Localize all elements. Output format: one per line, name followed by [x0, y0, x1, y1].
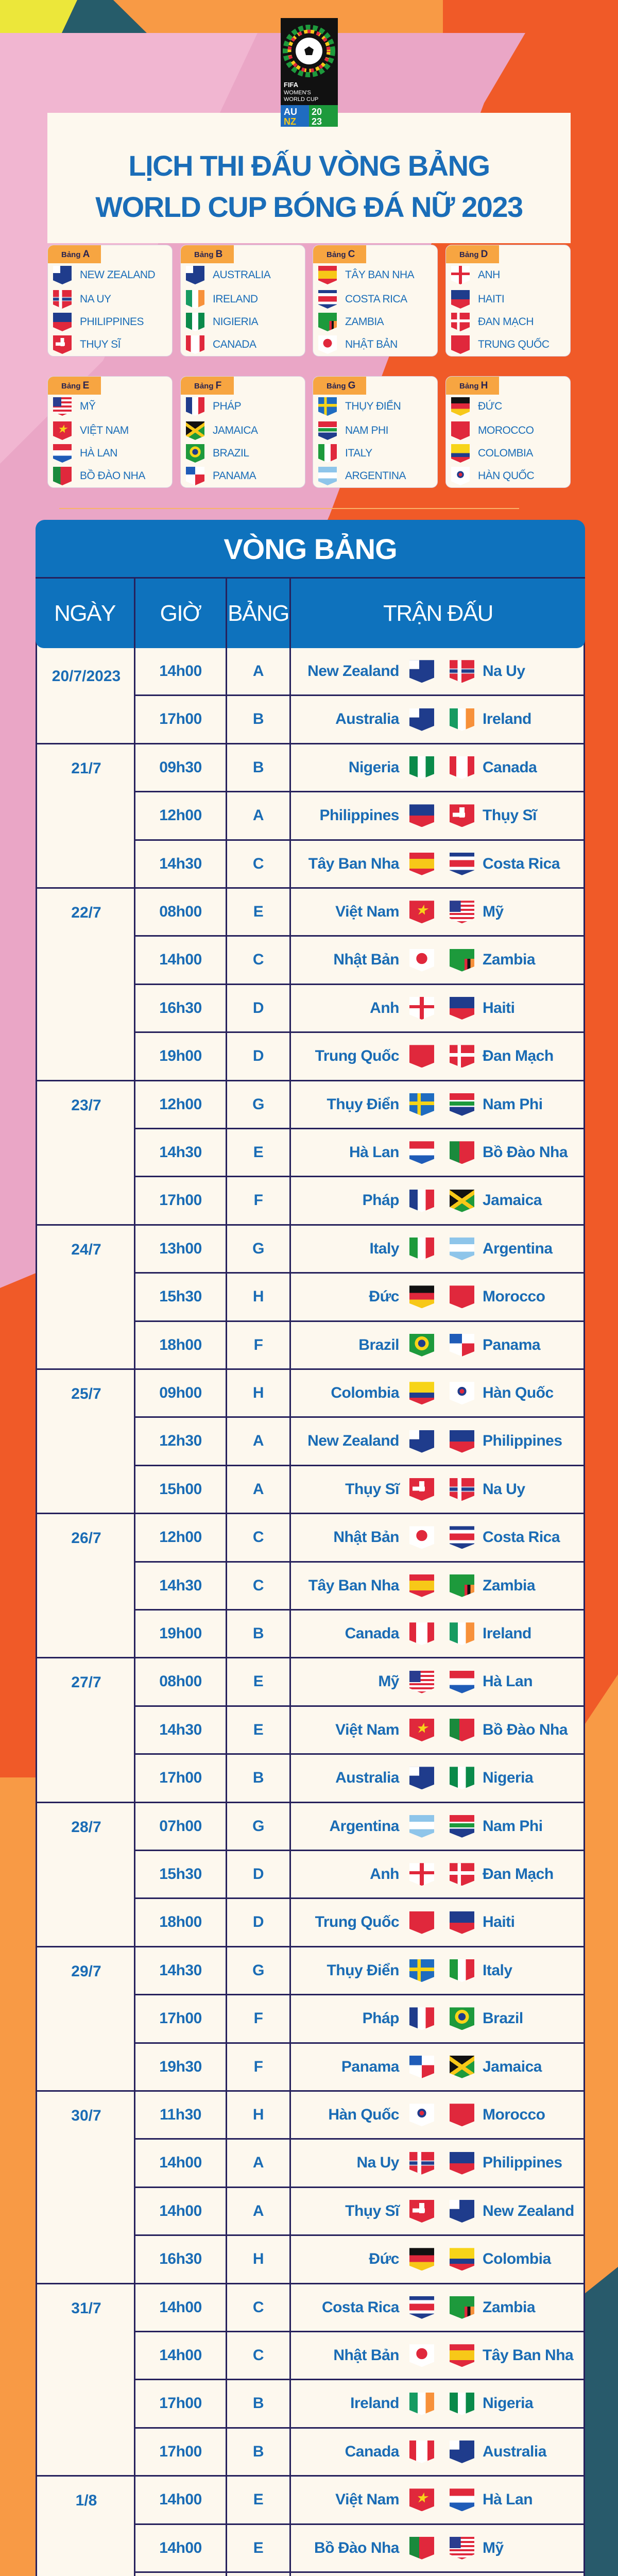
match rows: 08h00 [159, 1673, 202, 1690]
match rows: C [253, 951, 264, 968]
match rows: Việt Nam [335, 2491, 399, 2508]
match rows: Na Uy [483, 1481, 525, 1498]
table title [36, 520, 585, 579]
match rows: Bồ Đào Nha [483, 1144, 568, 1161]
match rows: Panama [341, 2058, 399, 2075]
group C: ZAMBIA [345, 316, 384, 328]
match rows: E [253, 2491, 263, 2508]
match rows: Canada [345, 2443, 399, 2460]
match rows: Costa Rica [322, 2299, 399, 2316]
match rows: 14h00 [159, 951, 202, 968]
match rows: F [254, 2058, 263, 2075]
match rows: A [253, 807, 264, 824]
match rows: Zambia [483, 1577, 535, 1594]
match rows: G [252, 1962, 264, 1979]
match rows: Thụy Điển [327, 1962, 399, 1979]
match rows: Zambia [483, 951, 535, 968]
date 21/7: 21/7 [71, 760, 101, 777]
match rows: H [253, 1288, 264, 1305]
date 27/7 [37, 1658, 135, 1803]
group D [445, 245, 571, 357]
match rows: Ireland [483, 710, 531, 727]
match rows: Thụy Sĩ [345, 2202, 399, 2219]
match rows: H [253, 1384, 264, 1401]
match rows: 14h00 [159, 2154, 202, 2171]
match rows: E [253, 1673, 263, 1690]
match rows: Hà Lan [349, 1144, 399, 1161]
group C: NHẬT BẢN [345, 338, 398, 350]
group A: Bảng A [61, 249, 90, 260]
match rows: Thụy Điển [327, 1096, 399, 1113]
match rows: Anh [370, 1866, 399, 1883]
group D: ANH [478, 269, 500, 281]
date 31/7 [37, 2284, 135, 2477]
group G [313, 376, 438, 488]
logo: FIFA Women's World Cup 2023: 23 [312, 116, 322, 127]
match rows: D [253, 1866, 264, 1883]
group G: NAM PHI [345, 425, 388, 436]
table title: VÒNG BẢNG [224, 533, 397, 565]
group B: AUSTRALIA [213, 269, 270, 281]
match rows: Nigeria [483, 2395, 533, 2412]
group E: Bảng E [61, 380, 89, 391]
match rows: Zambia [483, 2299, 535, 2316]
match rows: Italy [369, 1240, 399, 1257]
title: WORLD CUP BÓNG ĐÁ NỮ 2023 [95, 191, 523, 223]
match rows: G [252, 1240, 264, 1257]
match rows: 17h00 [159, 1769, 202, 1786]
group A: NA UY [80, 293, 111, 305]
date 25/7 [37, 1370, 135, 1514]
match rows: Italy [483, 1962, 512, 1979]
date 30/7 [37, 2092, 135, 2284]
match rows: 17h00 [159, 2395, 202, 2412]
match rows: B [253, 759, 264, 776]
group E: VIỆT NAM [80, 425, 129, 436]
date 21/7 [37, 744, 135, 889]
match rows: Jamaica [483, 1192, 542, 1209]
match rows: Colombia [483, 2250, 551, 2267]
match rows: 16h30 [159, 2250, 202, 2267]
date 1/8: 1/8 [76, 2492, 97, 2509]
match rows: Hàn Quốc [483, 1384, 554, 1401]
match rows: Bồ Đào Nha [483, 1721, 568, 1738]
match rows: Canada [345, 1625, 399, 1642]
group G: THỤY ĐIỂN [345, 400, 401, 412]
group A [47, 245, 173, 357]
group F: BRAZIL [213, 447, 249, 459]
match rows: New Zealand [307, 663, 399, 680]
match rows: Morocco [483, 2106, 545, 2123]
match rows: 09h00 [159, 1384, 202, 1401]
match rows: 14h00 [159, 2347, 202, 2364]
match rows: 12h30 [159, 1432, 202, 1449]
date 24/7 [37, 1226, 135, 1370]
match rows: B [253, 2395, 264, 2412]
match rows: D [253, 1913, 264, 1930]
date 20/7/2023 [37, 648, 135, 744]
match rows: E [253, 2539, 263, 2556]
group C [313, 245, 438, 357]
date 26/7: 26/7 [71, 1530, 101, 1547]
match rows: 14h30 [159, 1721, 202, 1738]
match rows: Canada [483, 759, 537, 776]
logo: FIFA Women's World Cup 2023: WORLD CUP [284, 96, 318, 103]
group D: Bảng D [459, 249, 488, 260]
match rows: Australia [335, 710, 399, 727]
match rows: Brazil [483, 2010, 523, 2027]
match rows: 12h00 [159, 1096, 202, 1113]
match rows: 14h30 [159, 1577, 202, 1594]
date 26/7 [37, 1514, 135, 1658]
match rows: Anh [370, 999, 399, 1016]
match rows: 17h00 [159, 2010, 202, 2027]
match rows: 11h30 [160, 2106, 201, 2123]
group F: PANAMA [213, 470, 256, 482]
match rows: E [253, 903, 263, 920]
match rows: Pháp [363, 1192, 399, 1209]
group A: PHILIPPINES [80, 316, 144, 328]
group H: COLOMBIA [478, 447, 533, 459]
match rows: Mỹ [378, 1673, 399, 1690]
group B: NIGIERIA [213, 316, 258, 328]
date 24/7: 24/7 [71, 1241, 101, 1258]
logo: FIFA Women's World Cup 2023: WOMEN'S [284, 90, 311, 96]
date 28/7 [37, 1803, 135, 1947]
group A: THỤY SĨ [80, 338, 121, 350]
match rows: Hà Lan [483, 1673, 533, 1690]
match rows: Costa Rica [483, 855, 560, 872]
match rows: Brazil [358, 1336, 399, 1353]
match rows [134, 648, 583, 2576]
match rows: A [253, 2202, 264, 2219]
logo: FIFA Women's World Cup 2023 [281, 18, 338, 127]
match rows: 12h00 [159, 807, 202, 824]
group H: Bảng H [459, 380, 488, 391]
match rows: 17h00 [159, 710, 202, 727]
date 31/7: 31/7 [71, 2300, 101, 2317]
match rows: New Zealand [483, 2202, 574, 2219]
group D: TRUNG QUỐC [478, 338, 549, 350]
match rows: 14h30 [159, 1962, 202, 1979]
date 22/7: 22/7 [71, 904, 101, 921]
match rows: 16h30 [159, 999, 202, 1016]
match rows: 13h00 [159, 1240, 202, 1257]
logo: FIFA Women's World Cup 2023: 20 [312, 107, 322, 117]
date 27/7: 27/7 [71, 1674, 101, 1691]
column headers: BẢNG [228, 601, 289, 626]
column headers: NGÀY [54, 601, 115, 626]
match rows: 14h00 [159, 2539, 202, 2556]
match rows: Hà Lan [483, 2491, 533, 2508]
group C: COSTA RICA [345, 293, 407, 305]
match rows: Nam Phi [483, 1818, 543, 1835]
match rows: Việt Nam [335, 903, 399, 920]
match rows: Colombia [331, 1384, 399, 1401]
match rows: Panama [483, 1336, 540, 1353]
match rows: Na Uy [483, 663, 525, 680]
date 22/7 [37, 889, 135, 1081]
match rows: A [253, 1432, 264, 1449]
group E: HÀ LAN [80, 447, 117, 459]
match rows: Jamaica [483, 2058, 542, 2075]
column headers [36, 579, 585, 648]
group C: Bảng C [327, 249, 355, 260]
title: LỊCH THI ĐẤU VÒNG BẢNG [128, 149, 490, 182]
match rows: Đan Mạch [483, 1866, 554, 1883]
group D: HAITI [478, 293, 504, 305]
match rows: Morocco [483, 1288, 545, 1305]
group F [180, 376, 305, 488]
match rows: 14h00 [159, 2299, 202, 2316]
match rows: B [253, 1625, 264, 1642]
group B: CANADA [213, 338, 256, 350]
match rows: C [253, 1529, 264, 1546]
match rows: 14h00 [159, 2491, 202, 2508]
match rows: B [253, 710, 264, 727]
group H: MOROCCO [478, 425, 534, 436]
match rows: 15h00 [159, 1481, 202, 1498]
group G: ARGENTINA [345, 470, 406, 482]
date 30/7: 30/7 [71, 2107, 101, 2124]
match rows: 19h00 [159, 1047, 202, 1064]
match rows: Việt Nam [335, 1721, 399, 1738]
match rows: Ireland [350, 2395, 399, 2412]
date 29/7 [37, 1947, 135, 2092]
schedule table [36, 520, 585, 2576]
match rows: G [252, 1096, 264, 1113]
match rows: Na Uy [356, 2154, 399, 2171]
group G: Bảng G [327, 380, 355, 391]
group D: ĐAN MẠCH [478, 316, 534, 328]
match rows: 19h30 [159, 2058, 202, 2075]
match rows: Mỹ [483, 2539, 504, 2556]
date 28/7: 28/7 [71, 1819, 101, 1836]
match rows: Thụy Sĩ [345, 1481, 399, 1498]
match rows: 15h30 [159, 1288, 202, 1305]
match rows: C [253, 1577, 264, 1594]
match rows: E [253, 1721, 263, 1738]
match rows: H [253, 2250, 264, 2267]
logo: FIFA Women's World Cup 2023: FIFA [284, 81, 299, 89]
match rows: 14h30 [159, 1144, 202, 1161]
match rows: 17h00 [159, 1192, 202, 1209]
match rows: B [253, 2443, 264, 2460]
match rows: 17h00 [159, 2443, 202, 2460]
match rows: Nhật Bản [333, 2347, 399, 2364]
match rows: Philippines [483, 1432, 562, 1449]
group B: IRELAND [213, 293, 258, 305]
title [95, 149, 523, 223]
group H [445, 376, 571, 488]
match rows: C [253, 2347, 264, 2364]
match rows: Nhật Bản [333, 951, 399, 968]
match rows: C [253, 855, 264, 872]
match rows: F [254, 2010, 263, 2027]
match rows: Bồ Đào Nha [314, 2539, 399, 2556]
match rows: Philippines [483, 2154, 562, 2171]
column headers: TRẬN ĐẤU [383, 601, 493, 626]
group H: ĐỨC [478, 400, 502, 412]
match rows: Australia [483, 2443, 546, 2460]
match rows: E [253, 1144, 263, 1161]
match rows: F [254, 1336, 263, 1353]
match rows: 14h00 [159, 663, 202, 680]
match rows: New Zealand [307, 1432, 399, 1449]
match rows: Nigeria [349, 759, 399, 776]
group E: MỸ [80, 400, 96, 412]
match rows: D [253, 1047, 264, 1064]
date 23/7: 23/7 [71, 1097, 101, 1114]
date 20/7/2023: 20/7/2023 [52, 668, 121, 685]
match rows: 08h00 [159, 903, 202, 920]
header panel [47, 113, 571, 243]
match rows: A [253, 1481, 264, 1498]
group A: NEW ZEALAND [80, 269, 155, 281]
match rows: 18h00 [159, 1913, 202, 1930]
group C: TÂY BAN NHA [345, 269, 414, 281]
match rows: Đức [369, 2250, 399, 2267]
match rows: Tây Ban Nha [308, 1577, 399, 1594]
group F: Bảng F [194, 380, 221, 391]
match rows: Đức [369, 1288, 399, 1305]
match rows: Pháp [363, 2010, 399, 2027]
match rows: Ireland [483, 1625, 531, 1642]
date 23/7 [37, 1081, 135, 1226]
match rows: 18h00 [159, 1336, 202, 1353]
match rows: F [254, 1192, 263, 1209]
match rows: 07h00 [159, 1818, 202, 1835]
group G: ITALY [345, 447, 372, 459]
match rows: Haiti [483, 1913, 515, 1930]
date 1/8 [37, 2477, 135, 2576]
column headers: GIỜ [160, 601, 201, 626]
match rows: 14h00 [159, 2202, 202, 2219]
match rows: 09h30 [159, 759, 202, 776]
match rows: Mỹ [483, 903, 504, 920]
match rows: Costa Rica [483, 1529, 560, 1546]
match rows: C [253, 2299, 264, 2316]
match rows: D [253, 999, 264, 1016]
match rows: Nhật Bản [333, 1529, 399, 1546]
match rows: Hàn Quốc [328, 2106, 399, 2123]
group E: BỒ ĐÀO NHA [80, 470, 145, 482]
logo: FIFA Women's World Cup 2023: NZ [284, 116, 296, 127]
match rows: 15h30 [159, 1866, 202, 1883]
group B [180, 245, 305, 357]
match rows: Philippines [319, 807, 399, 824]
logo: FIFA Women's World Cup 2023: AU [284, 107, 297, 117]
group F: PHÁP [213, 400, 241, 412]
match rows: Nigeria [483, 1769, 533, 1786]
match rows: Tây Ban Nha [308, 855, 399, 872]
match rows: Haiti [483, 999, 515, 1016]
date 29/7: 29/7 [71, 1963, 101, 1980]
match rows: Australia [335, 1769, 399, 1786]
match rows: 19h00 [159, 1625, 202, 1642]
match rows: 12h00 [159, 1529, 202, 1546]
group B: Bảng B [194, 249, 222, 260]
match rows: B [253, 1769, 264, 1786]
match rows: A [253, 2154, 264, 2171]
match rows: Trung Quốc [315, 1047, 399, 1064]
date 25/7: 25/7 [71, 1385, 101, 1402]
match rows: Argentina [483, 1240, 553, 1257]
group H: HÀN QUỐC [478, 470, 534, 482]
group F: JAMAICA [213, 425, 258, 436]
match rows: 14h30 [159, 855, 202, 872]
match rows: H [253, 2106, 264, 2123]
match rows: Tây Ban Nha [483, 2347, 573, 2364]
match rows: G [252, 1818, 264, 1835]
match rows: A [253, 663, 264, 680]
match rows: Thụy Sĩ [483, 807, 537, 824]
match rows: Trung Quốc [315, 1913, 399, 1930]
match rows: Đan Mạch [483, 1047, 554, 1064]
group E [47, 376, 173, 488]
match rows: Nam Phi [483, 1096, 543, 1113]
match rows: Argentina [329, 1818, 399, 1835]
